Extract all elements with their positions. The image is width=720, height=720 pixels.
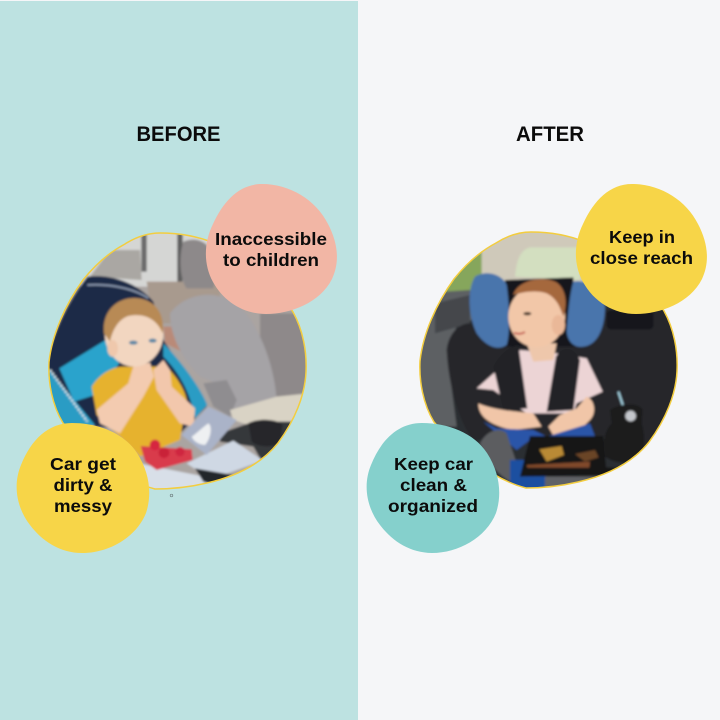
callout: keep car clean and organized: clean &: [400, 475, 467, 495]
panel: after background: [358, 0, 720, 720]
photo outline: after: [420, 232, 677, 488]
photo: toddler eating raspberries in car seat: [43, 227, 310, 493]
callout: keep car clean and organized: organized: [388, 496, 478, 516]
callout: inaccessible to children: to children: [223, 250, 319, 270]
heading: before: BEFORE: [136, 122, 220, 146]
panel: before background: [0, 1, 358, 720]
photo outline: before: [49, 233, 306, 489]
callout: keep in close reach: Keep in: [609, 227, 675, 247]
callout: keep in close reach: [576, 184, 707, 314]
callout: inaccessible to children: [206, 184, 337, 314]
callout: keep in close reach: close reach: [590, 248, 693, 268]
callout: car get dirty and messy: Car get: [50, 454, 116, 474]
callout: keep car clean and organized: Keep car: [394, 454, 473, 474]
callout: car get dirty and messy: messy: [54, 496, 112, 516]
photo: toddler with snack tray in car seat: [417, 227, 683, 493]
heading: after: AFTER: [516, 122, 584, 146]
callout: car get dirty and messy: [17, 423, 149, 553]
callout: keep car clean and organized: [367, 423, 499, 553]
marker: small dot: [170, 494, 173, 497]
callout: car get dirty and messy: dirty &: [54, 475, 113, 495]
callout: inaccessible to children: Inaccessible: [215, 229, 327, 249]
